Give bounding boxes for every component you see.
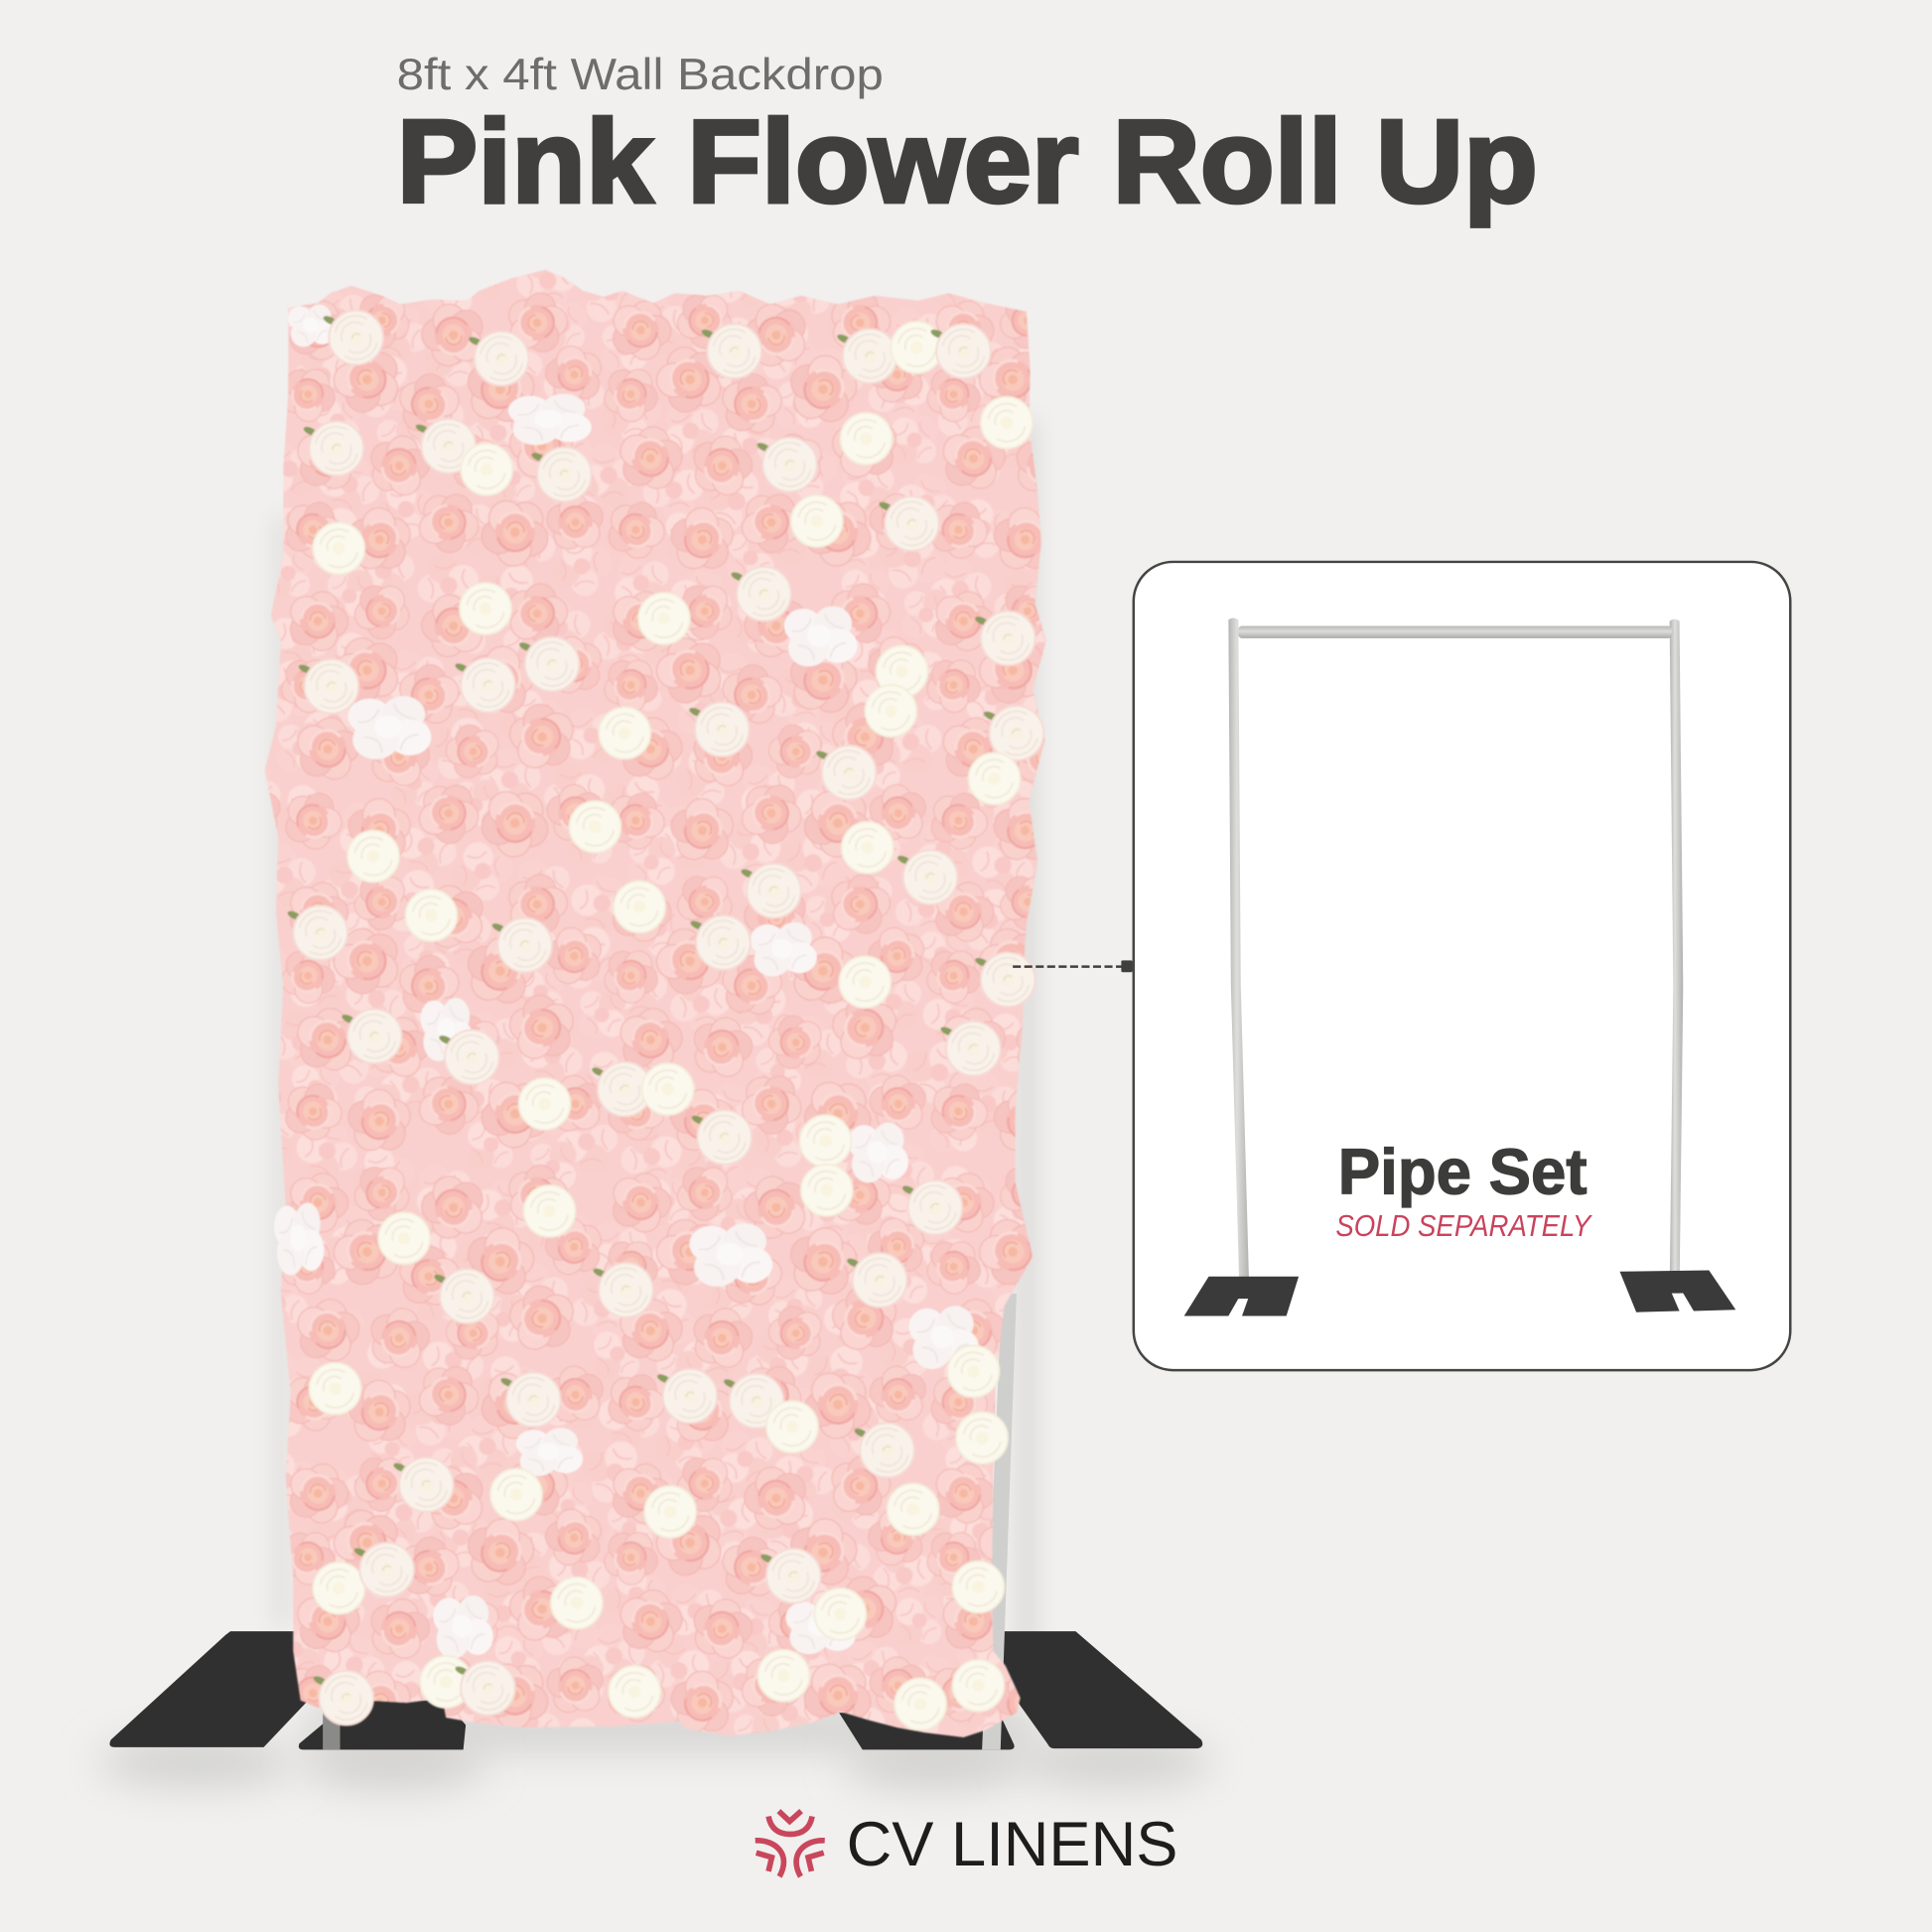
white and cream roses xyxy=(286,311,1043,1729)
base plates and hidden pipes of wall xyxy=(109,1294,1202,1749)
icon: CV Linens logo xyxy=(756,1811,825,1876)
floor shadow xyxy=(98,419,1213,1789)
sold separately note: SOLD SEPARATELY xyxy=(1335,1209,1593,1243)
pipe set label: Pipe Set xyxy=(1338,1137,1587,1208)
title: Pink Flower Roll Up xyxy=(397,95,1538,227)
pipe frame xyxy=(1184,618,1735,1315)
white hydrangeas xyxy=(274,305,979,1659)
panel: pipe set xyxy=(1134,562,1790,1370)
flower wall xyxy=(265,270,1046,1737)
connector from wall to pipe set xyxy=(1013,960,1133,972)
subtitle: 8ft x 4ft Wall Backdrop xyxy=(397,51,884,99)
brand name: CV LINENS xyxy=(847,1810,1177,1879)
